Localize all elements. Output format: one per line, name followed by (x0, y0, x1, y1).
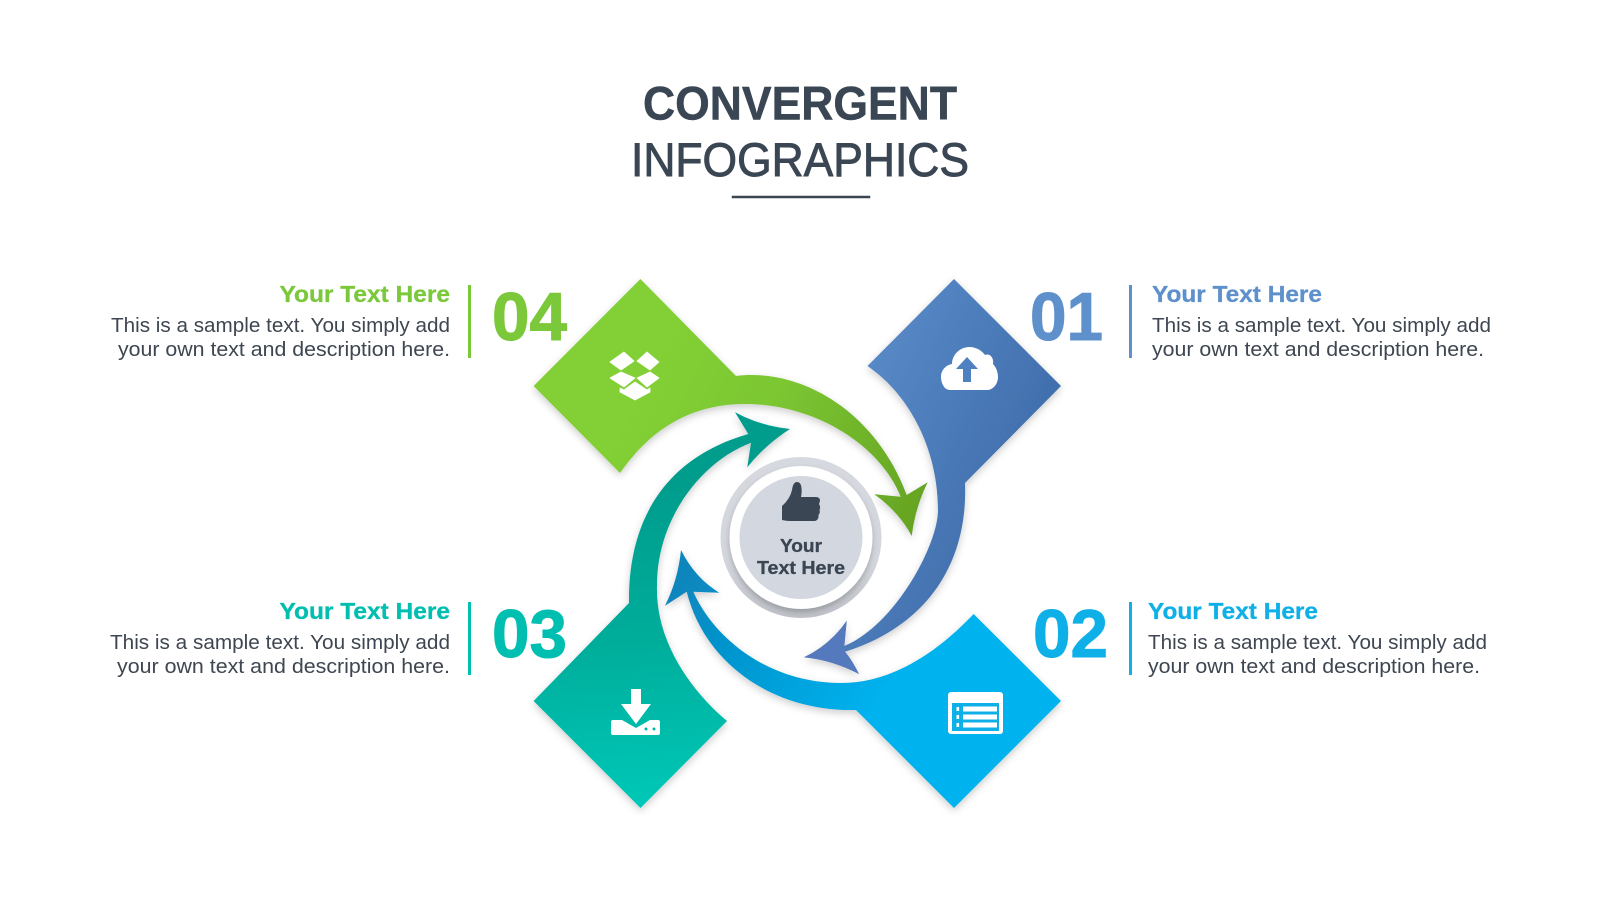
title (631, 76, 969, 198)
number 01: 01 (1030, 279, 1103, 355)
text block 03 (110, 596, 567, 678)
description 04 (111, 314, 450, 361)
description 01: your own text and description here. (1152, 338, 1484, 361)
description 01: This is a sample text. You simply add (1152, 314, 1491, 337)
text block 04 (111, 279, 567, 361)
description 02 (1148, 631, 1487, 678)
number 04: 04 (492, 279, 567, 355)
center label: Your (780, 536, 822, 556)
text block 02 (1033, 596, 1487, 678)
icon: server list (948, 692, 1003, 734)
heading 04: Your Text Here (280, 281, 450, 307)
description 03: your own text and description here. (117, 655, 450, 678)
icon: thumbs up (782, 482, 820, 521)
description 03 (110, 631, 450, 678)
center label (757, 536, 845, 578)
icon: download (611, 689, 660, 735)
arrow panel 02: cyan (665, 550, 1061, 808)
text block 01 (1030, 279, 1491, 361)
description 04: your own text and description here. (118, 338, 450, 361)
description 03: This is a sample text. You simply add (110, 631, 450, 654)
heading 02: Your Text Here (1148, 598, 1318, 624)
description 04: This is a sample text. You simply add (111, 314, 450, 337)
number 02: 02 (1033, 596, 1108, 672)
icon: dropbox (610, 352, 659, 400)
description 02: This is a sample text. You simply add (1148, 631, 1487, 654)
center label: Text Here (757, 558, 845, 578)
center circle (720, 457, 882, 618)
arrowhead shade: blue (804, 621, 859, 674)
arrow panel 04: green (534, 279, 928, 536)
icon: cloud upload (941, 347, 998, 390)
number 03: 03 (492, 596, 567, 672)
title: INFOGRAPHICS (631, 133, 969, 186)
description 02: your own text and description here. (1148, 655, 1480, 678)
heading 01: Your Text Here (1152, 281, 1322, 307)
heading 03: Your Text Here (280, 598, 450, 624)
arrow panel 01: blue (804, 279, 1061, 674)
arrow panel 03: teal (534, 412, 790, 808)
description 01 (1152, 314, 1491, 361)
title: CONVERGENT (643, 76, 957, 130)
